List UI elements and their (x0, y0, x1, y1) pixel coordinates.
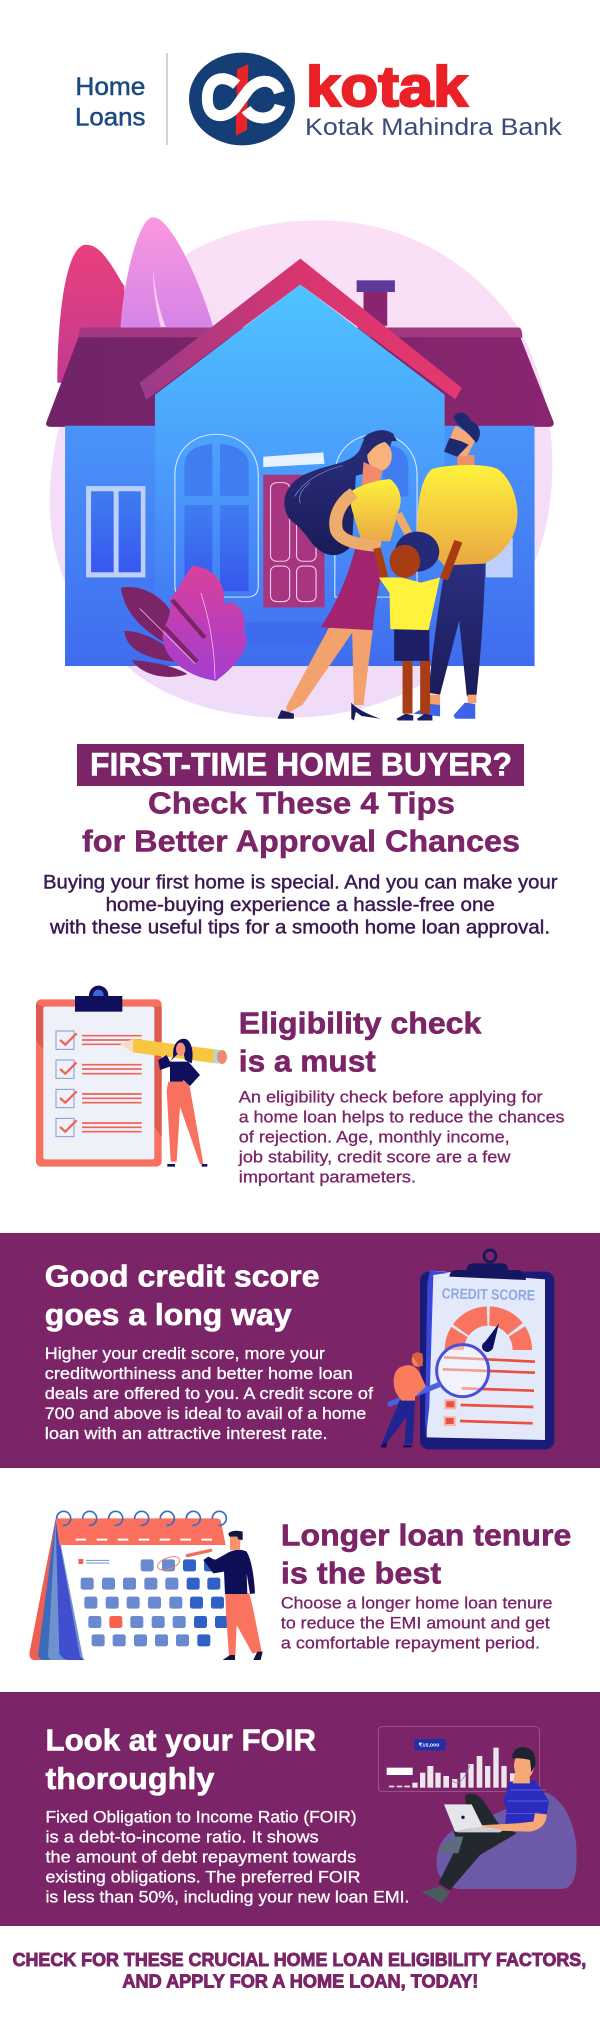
lower right window (486, 538, 513, 577)
text: credit score body: creditworthiness and better home loan (45, 1365, 353, 1383)
background trees (57, 217, 213, 383)
text: FOIR body (46, 1809, 409, 1907)
man (413, 413, 517, 719)
section: longer loan tenure (29, 1511, 571, 1660)
text: Home Loans: Loans (75, 103, 145, 131)
illustration: family in front of house (46, 217, 554, 720)
central gable wall (155, 284, 445, 666)
man with pencil (187, 1531, 263, 1660)
woman (277, 430, 411, 720)
panel: good credit score (0, 1233, 600, 1468)
calendar header (56, 1518, 226, 1545)
man with magnifier (381, 1352, 426, 1447)
logo header (75, 53, 563, 145)
text: Home Loans: Home (75, 73, 145, 101)
binder rings (57, 1511, 226, 1525)
magnifier (390, 1345, 489, 1404)
arched window (175, 434, 258, 597)
left window (86, 486, 145, 577)
house walls (65, 426, 535, 666)
text: tenure body: to reduce the EMI amount and get (281, 1614, 550, 1632)
heading: look at your FOIR: Look at your FOIR (46, 1723, 316, 1758)
intro paragraph (43, 871, 558, 938)
illustration: checklist clipboard with woman (36, 986, 227, 1167)
calendar sheets (29, 1518, 85, 1660)
title block (43, 744, 558, 938)
gable roof trim (140, 259, 462, 400)
chart frame (378, 1727, 539, 1792)
section: eligibility check (36, 986, 564, 1186)
calendar date cells (81, 1559, 189, 1646)
text: Kotak Mahindra Bank: Kotak Mahindra Bank (305, 114, 563, 141)
text: eligibility body (238, 1088, 564, 1186)
illustration: man on beanbag with chart (378, 1727, 577, 1903)
text: FOIR body: the amount of debt repayment towards (46, 1849, 356, 1867)
right arched window (335, 434, 417, 597)
text: credit score body: loan with an attractive interest rate. (45, 1425, 328, 1443)
plant (121, 565, 247, 681)
footer call to action: CHECK FOR THESE CRUCIAL HOME LOAN ELIGIBILITY FACTORS, (13, 1949, 586, 1970)
footer call to action (13, 1949, 586, 1991)
illustration: credit score clipboard (381, 1250, 554, 1449)
text: eligibility body: An eligibility check before applying for (239, 1088, 543, 1106)
text: Home Loans (75, 73, 145, 131)
heading: good credit score: Good credit score (45, 1259, 320, 1294)
heading: check these 4 tips: Check These 4 Tips (148, 785, 455, 820)
heading: longer loan tenure: Longer loan tenure (281, 1518, 571, 1553)
bar chart (387, 1748, 515, 1788)
panel: FOIR (0, 1692, 600, 1926)
text: FOIR body: existing obligations. The preferred FOIR (46, 1869, 361, 1887)
text: credit score body: deals are offered to you. A credit score of (45, 1385, 373, 1403)
intro paragraph: home-buying experience a hassle-free one (106, 894, 495, 916)
text: eligibility body: job stability, credit score are a few (238, 1148, 511, 1166)
text: eligibility body: a home loan helps to reduce the chances (239, 1108, 564, 1126)
heading: eligibility check: is a must (239, 1044, 376, 1079)
score lines (443, 1357, 535, 1423)
pencil (120, 1039, 227, 1064)
heading: good credit score (45, 1259, 320, 1332)
text: FOIR body: Fixed Obligation to Income Ratio (FOIR) (46, 1809, 357, 1827)
pink background blob (50, 220, 552, 718)
heading: look at your FOIR: thoroughly (46, 1761, 215, 1796)
child (377, 532, 458, 720)
text: tenure body: Choose a longer home loan tenure (281, 1594, 552, 1612)
side roof (46, 328, 554, 427)
heading: eligibility check (239, 1005, 482, 1079)
heading: check these 4 tips: for Better Approval Chances (82, 824, 520, 859)
text: credit score body: 700 and above is ideal to avail of a home (45, 1405, 366, 1423)
text: credit score body (45, 1345, 373, 1443)
tag: rupee value: ₹15,000 (419, 1743, 440, 1749)
tag: rupee value (414, 1739, 445, 1750)
heading: check these 4 tips (82, 785, 520, 859)
text: kotak wordmark: kotak (306, 55, 468, 119)
text: credit score body: Higher your credit score, more your (45, 1345, 326, 1363)
text: tenure body (281, 1594, 552, 1652)
heading: longer loan tenure: is the best (281, 1555, 441, 1590)
gauge needle (482, 1323, 499, 1352)
footer call to action: AND APPLY FOR A HOME LOAN, TODAY! (122, 1970, 478, 1991)
heading: longer loan tenure (281, 1518, 571, 1590)
heading: eligibility check: Eligibility check (239, 1005, 482, 1040)
intro paragraph: with these useful tips for a smooth home loan approval. (49, 916, 550, 938)
banner: first-time home buyer: FIRST-TIME HOME BUYER? (90, 747, 512, 783)
heading: look at your FOIR (46, 1723, 316, 1796)
checklist rows (56, 1031, 142, 1137)
text: eligibility body: important parameters. (239, 1168, 416, 1186)
heading: good credit score: goes a long way (45, 1297, 292, 1332)
text: FOIR body: is less than 50%, including your new loan EMI. (46, 1889, 409, 1907)
man on laptop (422, 1747, 549, 1903)
icon: Kotak infinity logo (189, 53, 295, 145)
chimney (357, 280, 395, 326)
door (245, 452, 348, 645)
text: eligibility body: of rejection. Age, monthly income, (239, 1128, 510, 1146)
intro paragraph: Buying your first home is special. And you can make your (43, 871, 558, 893)
beanbag (436, 1792, 577, 1889)
text: FOIR body: is a debt-to-income ratio. It shows (46, 1829, 319, 1847)
text: tenure body: a comfortable repayment period. (281, 1634, 540, 1652)
gauge (454, 1316, 522, 1350)
illustration: calendar and man (29, 1511, 263, 1660)
label: credit score: CREDIT SCORE (442, 1286, 535, 1304)
woman figure (158, 1039, 207, 1167)
